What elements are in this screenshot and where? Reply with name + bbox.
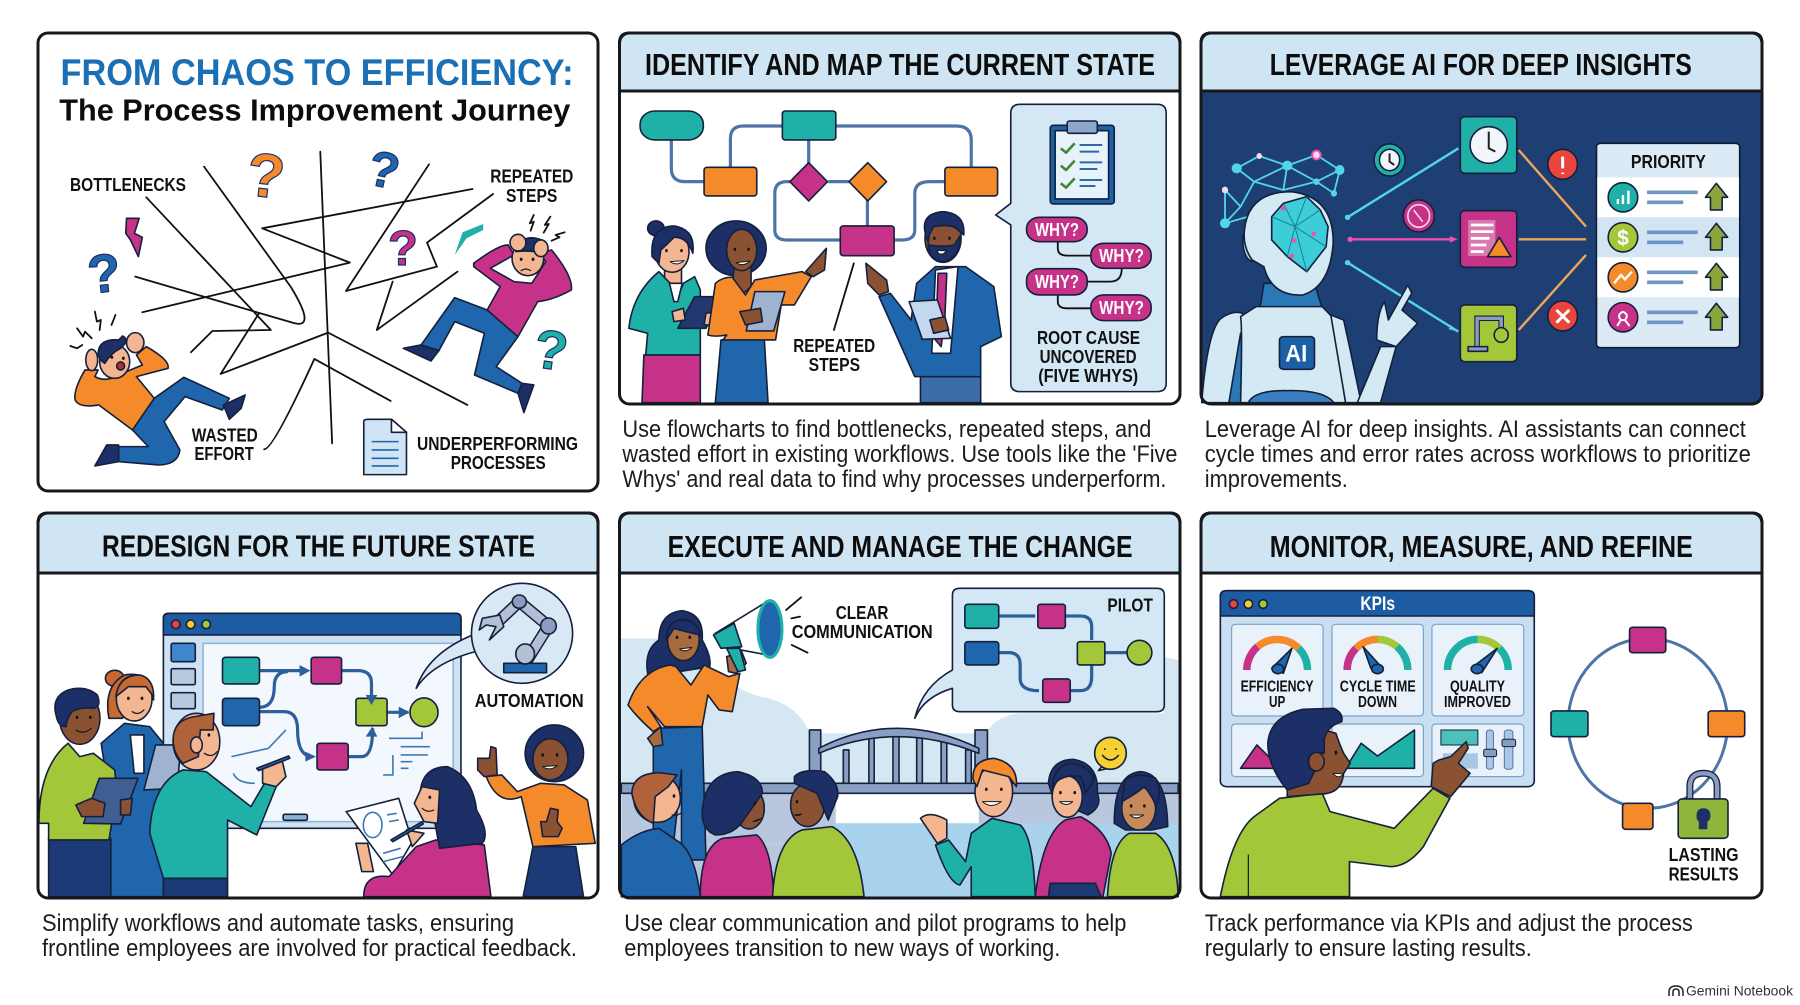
question marks: ? [388,222,418,276]
people and megaphone [621,597,1178,897]
question marks [85,139,572,383]
callout: five whys: ROOT CAUSE [1037,327,1140,348]
question marks: ? [243,140,288,213]
text: identify caption: Use flowcharts to find bottlenecks, repeated steps, and [622,416,1151,443]
label: automation: AUTOMATION [475,690,584,711]
callout: five whys [996,104,1166,392]
text: identify caption [621,416,1177,493]
callout: pilot flow [915,588,1164,718]
title [59,52,574,128]
KPI labels: QUALITY [1450,679,1505,696]
label: repeated steps: REPEATED [793,335,875,356]
AI robot [1202,151,1418,403]
group of people collaborating [39,670,595,897]
text: redesign caption: Simplify workflows and automate tasks, ensuring [42,910,514,937]
icon: robot arm callout [416,583,573,688]
label: repeated steps: STEPS [809,354,860,375]
icon: smiley [1095,737,1126,771]
figure: jumping man in magenta [403,234,572,413]
labels: chaos callouts: REPEATED [490,166,573,187]
gauges [1247,639,1508,670]
label: lasting results: LASTING [1669,844,1739,865]
panel: identify and map [620,33,1180,404]
KPI labels: DOWN [1358,694,1397,711]
question marks: ? [85,242,124,306]
panel: monitor [1201,513,1762,898]
callout: five whys: WHY? [1035,219,1079,240]
callout: five whys: WHY? [1035,271,1079,292]
labels: chaos callouts: WASTED [192,425,258,446]
labels: chaos callouts: EFFORT [194,443,254,464]
labels: clear communication and pilot: PILOT [1107,595,1153,616]
text: execute caption: Use clear communication and pilot programs to help [624,910,1126,937]
text: redesign caption [42,910,577,962]
people pointing at the flowchart [629,212,1001,403]
text: execute caption [624,910,1126,962]
KPI labels: IMPROVED [1444,694,1511,711]
heading: leverage: LEVERAGE AI FOR DEEP INSIGHTS [1270,47,1692,82]
whiteboard window [39,583,595,897]
icon: document [364,419,406,475]
heading: monitor [1201,513,1762,573]
improvement cycle with lock [1551,627,1745,838]
text: AI caption [1205,416,1751,493]
heading: identify: IDENTIFY AND MAP THE CURRENT STATE [645,47,1155,82]
labels: chaos callouts: BOTTLENECKS [70,174,186,195]
labels: chaos callouts [70,166,578,473]
title: The Process Improvement Journey [59,93,571,128]
text: monitor caption: regularly to ensure lasting results. [1205,935,1532,962]
labels: chaos callouts: STEPS [506,185,557,206]
labels: chaos callouts: UNDERPERFORMING [417,433,578,454]
icon: robot arm tile [1468,318,1508,351]
panel: redesign [38,513,598,898]
person pointing at dashboard [1220,708,1470,897]
text: monitor caption [1205,910,1693,962]
watermark: Gemini Notebook: Gemini Notebook [1686,983,1794,999]
panel: title and chaos [38,33,598,491]
labels: clear communication and pilot [792,595,1153,642]
text: identify caption: wasted effort in existing workflows. Use tools like the 'Five [621,441,1177,468]
heading: redesign: REDESIGN FOR THE FUTURE STATE [102,529,535,564]
callout: five whys: WHY? [1099,297,1144,318]
callout: five whys: UNCOVERED [1040,346,1137,367]
heading: redesign [38,513,598,573]
flow diagram on whiteboard [223,657,438,783]
question marks: ? [530,317,572,383]
text: AI caption: improvements. [1205,466,1348,493]
mini charts [1241,730,1516,769]
heading: execute: EXECUTE AND MANAGE THE CHANGE [668,529,1133,564]
callout: five whys: WHY? [1099,245,1144,266]
question marks: ? [363,139,405,201]
text: AI caption: Leverage AI for deep insights. AI assistants can connect [1205,416,1746,443]
callout: five whys: (FIVE WHYS) [1038,365,1138,386]
icon: clipboard [1050,121,1114,204]
KPI labels [1241,594,1511,711]
text: execute caption: employees transition to new ways of working. [624,935,1060,962]
icon: stress figures and shards [70,215,572,475]
panel: leverage AI [1201,33,1762,404]
heading: identify [620,33,1180,91]
label: lasting results [1669,844,1739,885]
KPI labels: KPIs [1360,594,1395,615]
labels: chaos callouts: PROCESSES [451,452,546,473]
panel: execute [620,513,1180,898]
text: monitor caption: Track performance via KPIs and adjust the process [1205,910,1693,937]
glowing connectors and process tiles [1345,117,1740,362]
heading: monitor: MONITOR, MEASURE, AND REFINE [1270,529,1693,564]
label: lasting results: RESULTS [1669,864,1739,885]
KPI labels: UP [1269,694,1286,711]
KPI dashboard [1220,591,1534,787]
flowchart [640,111,998,256]
labels: clear communication and pilot: CLEAR [836,602,888,623]
text: identify caption: Whys' and real data to find why processes underperform. [622,466,1166,493]
text: AI badge, dollar and priority [1285,151,1706,368]
text: AI badge, dollar and priority: $ [1617,227,1629,250]
label: repeated steps [793,335,875,375]
heading: leverage [1201,33,1762,91]
chaos tangled lines [135,152,493,449]
text: AI caption: cycle times and error rates across workflows to prioritize [1205,441,1751,468]
priority list [1597,143,1740,348]
heading: execute [620,513,1180,573]
text: AI badge, dollar and priority: AI [1285,340,1307,368]
text: redesign caption: frontline employees are involved for practical feedback. [42,935,577,962]
text: AI badge, dollar and priority: PRIORITY [1631,151,1706,172]
figure: falling man in orange [75,333,245,466]
title: FROM CHAOS TO EFFICIENCY: [60,52,574,93]
KPI labels: CYCLE TIME [1340,679,1416,696]
scene: sky and bridge [621,638,1178,898]
labels: clear communication and pilot: COMMUNICATION [792,621,933,642]
KPI labels: EFFICIENCY [1241,679,1314,696]
